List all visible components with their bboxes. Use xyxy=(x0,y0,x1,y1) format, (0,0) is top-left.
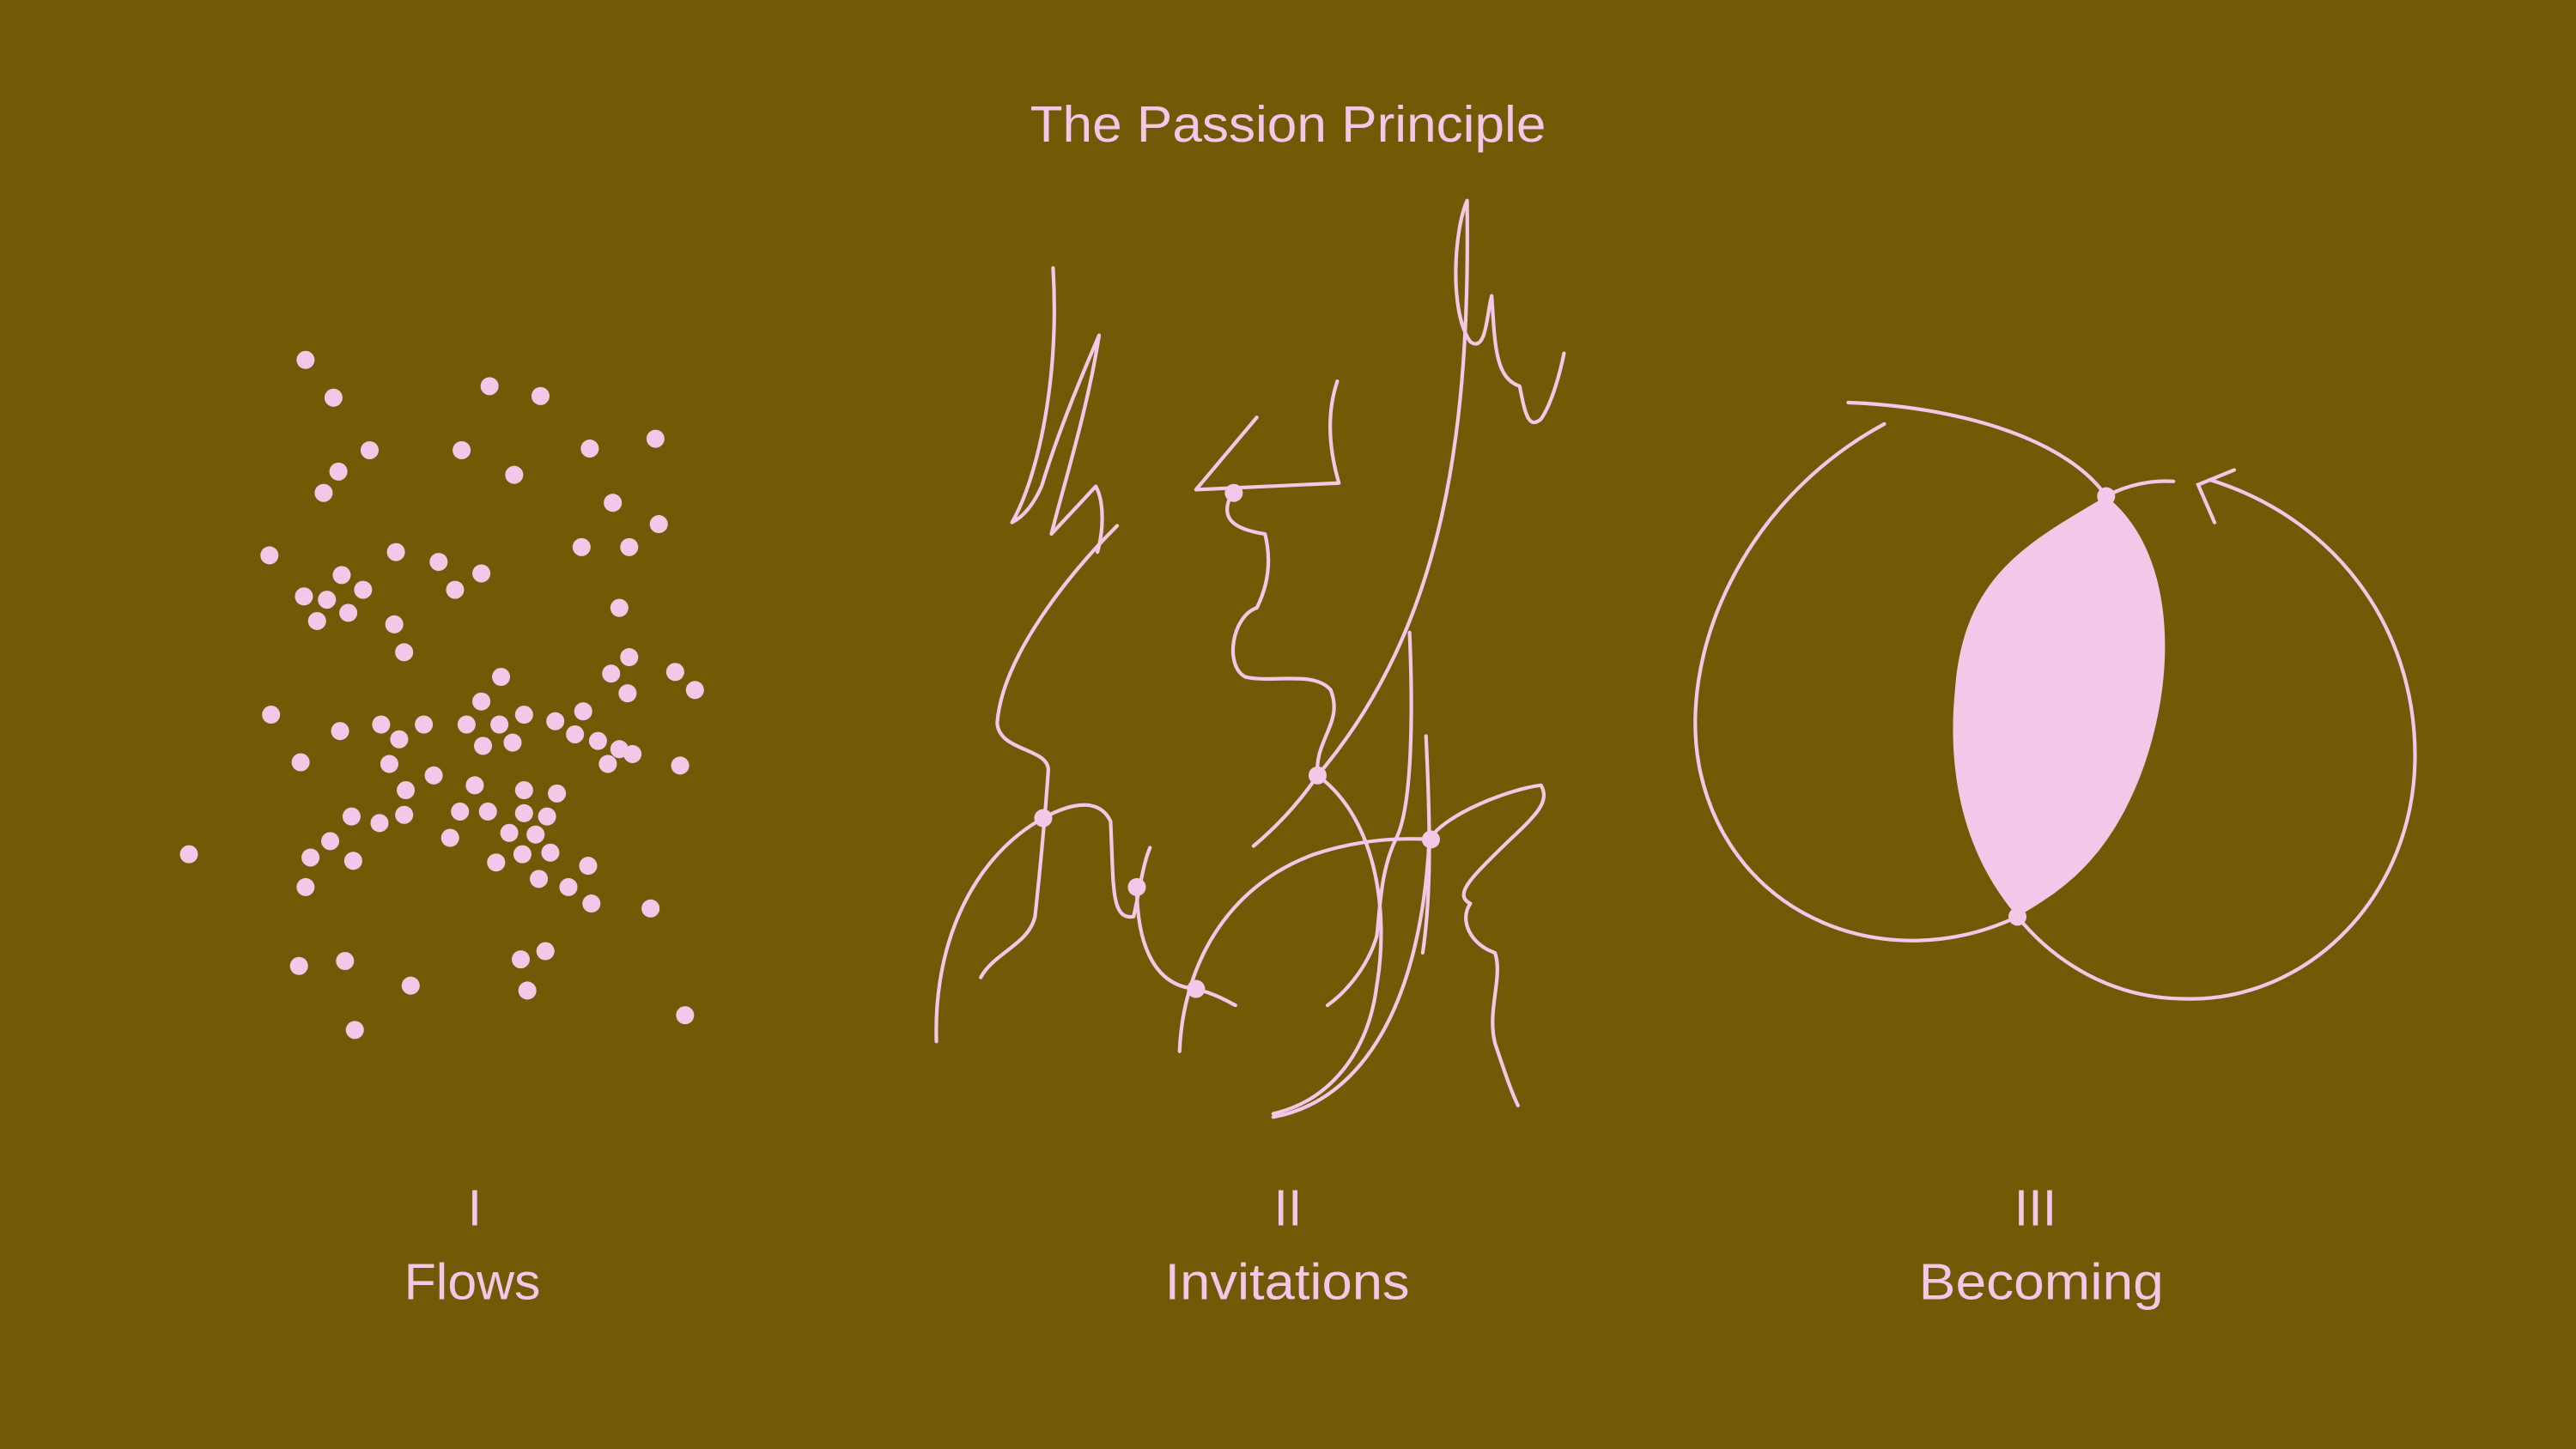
lens fill xyxy=(1953,496,2165,917)
intersection dots xyxy=(1034,484,1440,998)
label: II Invitations: Invitations xyxy=(1165,1253,1410,1311)
panel: becoming circles xyxy=(1695,403,2415,999)
label: III Becoming: III xyxy=(2014,1179,2057,1237)
label: II Invitations xyxy=(1165,1179,1410,1311)
label: III Becoming xyxy=(1919,1179,2164,1311)
title: The Passion Principle xyxy=(1030,95,1546,153)
label: I Flows: Flows xyxy=(404,1253,540,1311)
label: II Invitations: II xyxy=(1274,1179,1302,1237)
panel: invitations lines xyxy=(936,201,1564,1117)
label: I Flows xyxy=(404,1179,540,1311)
label: III Becoming: Becoming xyxy=(1919,1253,2164,1311)
panel: flows dots xyxy=(180,351,704,1039)
label: I Flows: I xyxy=(468,1179,482,1237)
